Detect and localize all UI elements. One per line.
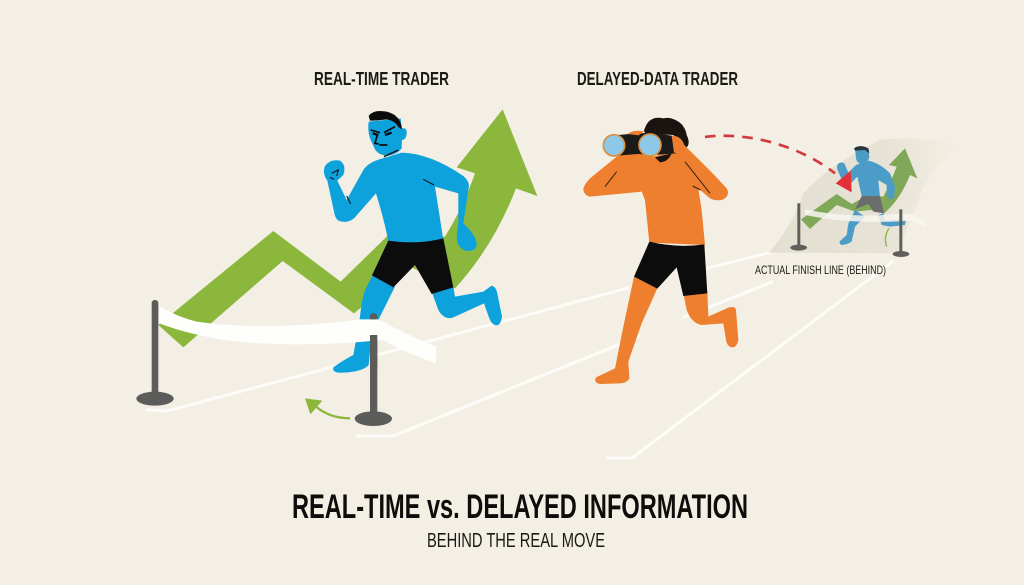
runner face details (330, 127, 434, 204)
distant actual finish line scene (705, 136, 960, 257)
runner torso and arms (324, 153, 477, 251)
green rising chart arrow (158, 109, 537, 347)
trader arm creases (605, 162, 710, 193)
faded runner shorts (855, 196, 884, 213)
finish post left (136, 300, 174, 406)
label: actual finish line: ACTUAL FINISH LINE (BEHIND) (755, 263, 886, 277)
runner front leg (333, 275, 395, 373)
post segment below ribbon (370, 335, 377, 368)
faded small green arrow (885, 228, 889, 247)
binoculars (603, 133, 676, 156)
runner hair (369, 111, 402, 129)
trader shorts (634, 242, 707, 296)
finish post right (355, 314, 392, 426)
faded runner hair (854, 146, 869, 153)
faded post right (893, 209, 909, 257)
runner back leg (432, 286, 502, 325)
runner head (368, 118, 407, 156)
trader hands on binoculars (627, 131, 685, 153)
faded green chart arrow (801, 148, 917, 229)
trader hair (644, 118, 689, 147)
trader back leg (683, 292, 738, 347)
track lane lines (147, 252, 892, 458)
real-time trader scene (136, 109, 537, 426)
subtitle: BEHIND THE REAL MOVE (427, 530, 605, 552)
runner shorts (372, 238, 453, 294)
faded grey swoosh backdrop (768, 138, 960, 253)
trader front leg (595, 277, 657, 384)
orange trader figure (583, 118, 738, 384)
delayed-data trader scene (583, 118, 738, 384)
trader beard (655, 153, 672, 162)
blue runner (324, 111, 502, 373)
small green curved arrow (305, 398, 350, 418)
trader torso and arms (583, 146, 728, 245)
label: real-time trader: REAL-TIME TRADER (314, 69, 449, 89)
faded post left (790, 203, 807, 251)
faded ribbon (805, 209, 927, 227)
post top above ribbon (370, 313, 377, 319)
white finish ribbon (159, 306, 436, 363)
red dashed arrow (705, 136, 852, 192)
faded blue runner (837, 148, 906, 245)
label: delayed-data trader: DELAYED-DATA TRADER (577, 69, 738, 89)
main title: REAL-TIME vs. DELAYED INFORMATION (292, 488, 748, 526)
